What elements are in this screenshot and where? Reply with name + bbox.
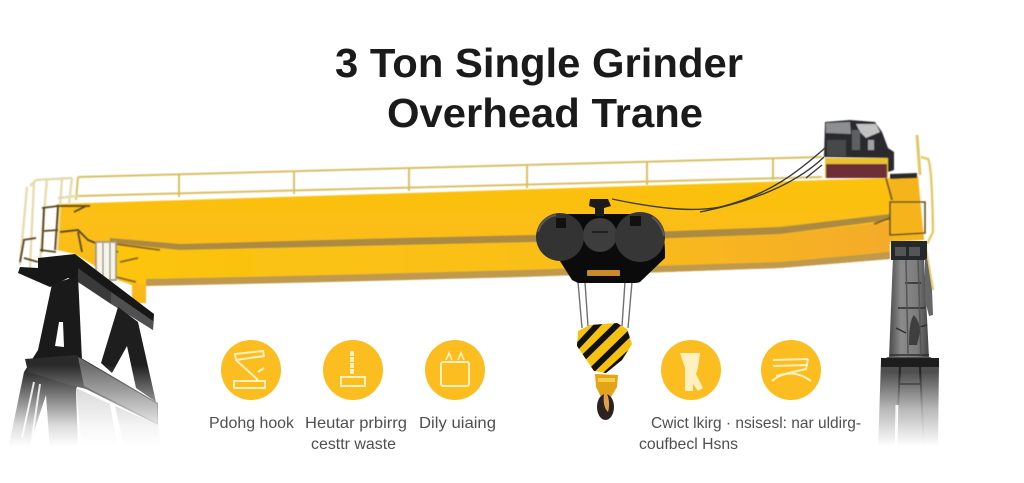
hoist — [536, 199, 665, 328]
feature labels — [209, 415, 861, 453]
lower cross beam — [25, 355, 158, 425]
right drum — [615, 212, 665, 262]
hoist nameplate — [587, 270, 620, 276]
lower bracing — [76, 388, 118, 450]
rear strut — [101, 307, 156, 402]
feature labels: Pdohg hook — [209, 415, 295, 432]
top collar — [891, 241, 927, 260]
feature icon: pillar — [323, 340, 383, 400]
wire ropes — [578, 282, 632, 328]
control box — [825, 158, 888, 178]
ground fade — [0, 365, 175, 452]
top platform — [18, 254, 154, 330]
centre drum — [583, 218, 617, 252]
title: Overhead Trane — [387, 90, 703, 136]
end plate frame — [890, 202, 925, 235]
feature labels: Heutar prbirrg — [305, 415, 407, 432]
top knob — [589, 199, 611, 216]
right support tower — [870, 241, 948, 452]
hook — [595, 374, 618, 420]
column — [889, 257, 929, 358]
column base — [878, 357, 939, 450]
hazard striped hook block — [577, 323, 632, 373]
left access ladder — [20, 206, 160, 282]
power cables — [612, 148, 825, 212]
left support tower — [0, 254, 175, 452]
feature icon: panel — [425, 340, 485, 400]
feature icon: rigging — [761, 340, 821, 400]
crane bridge girder — [57, 173, 925, 303]
feature icon: lifting hook — [221, 340, 281, 400]
left drum — [536, 213, 584, 261]
feature icon: tool — [661, 340, 721, 400]
feature labels: Cwict lkirg · nsisesl: nar uldirg- — [651, 415, 861, 432]
title — [335, 40, 743, 136]
feature labels: cesttr waste — [311, 436, 396, 453]
hoist body — [536, 214, 665, 283]
motor — [824, 120, 894, 172]
base fade — [870, 372, 948, 452]
guard railing — [20, 135, 933, 290]
feature labels: Dily uiaing — [419, 415, 496, 432]
main legs — [8, 276, 82, 450]
feature labels: coufbecl Hsns — [639, 436, 738, 453]
side bracket — [925, 258, 933, 316]
title: 3 Ton Single Grinder — [335, 40, 743, 86]
trolley motor unit — [824, 120, 894, 178]
